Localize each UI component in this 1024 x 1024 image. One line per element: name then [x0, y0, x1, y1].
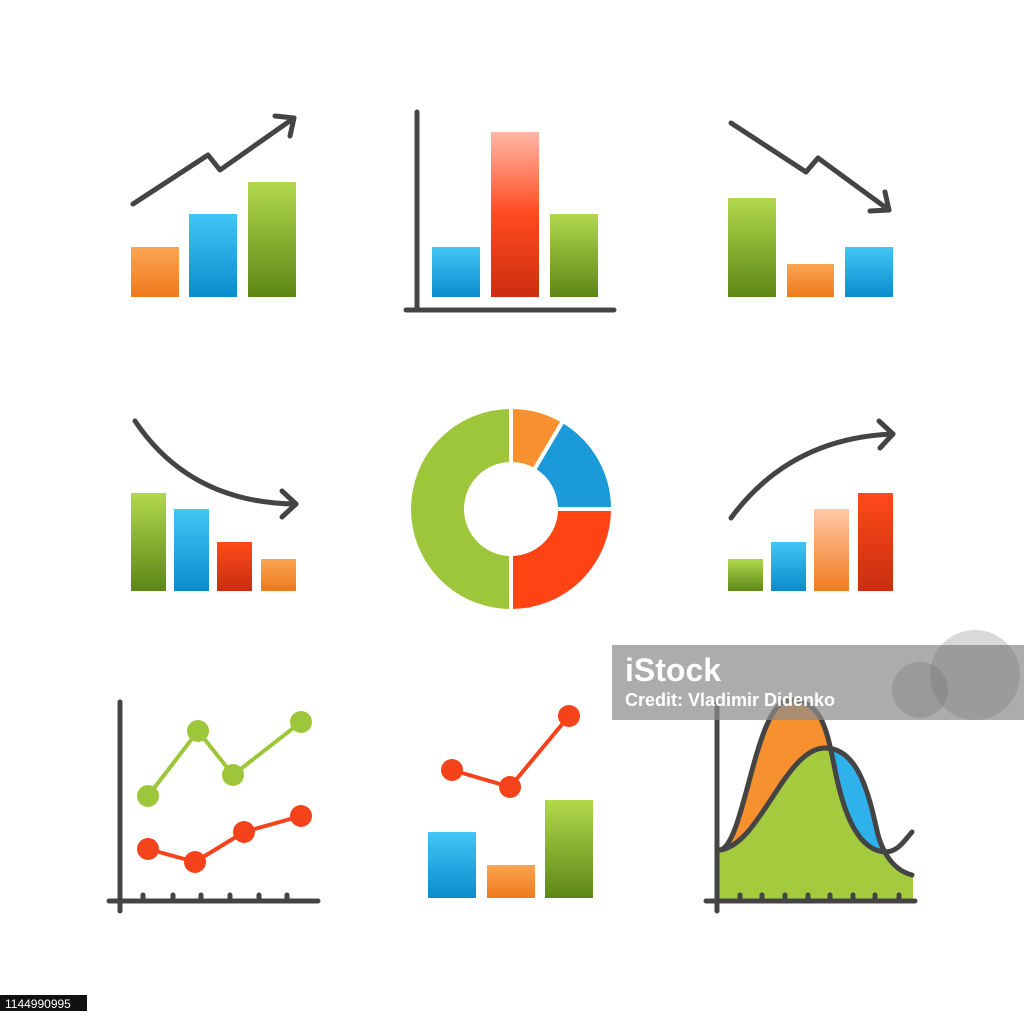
arrow: zigzag up [133, 116, 294, 204]
axes with ticks [109, 702, 318, 911]
panel: bars with line [428, 705, 593, 898]
arrow: curve down [135, 421, 296, 517]
red line [137, 805, 312, 873]
panel: rising bars with zigzag arrow [131, 116, 296, 297]
image id tag [0, 995, 87, 1011]
bars [131, 493, 296, 591]
image id tag: 1144990995 [5, 997, 71, 1011]
curve outlines [720, 700, 912, 852]
panel: decreasing bars with curved arrow [131, 421, 296, 591]
watermark band: Credit: Vladimir Didenko [625, 690, 835, 710]
bars [428, 800, 593, 898]
panel: donut chart [409, 407, 613, 611]
green area [717, 748, 913, 902]
panel: falling bars with zigzag arrow [728, 123, 893, 297]
arrow: zigzag down [731, 123, 889, 211]
green line [137, 711, 312, 807]
panel: distribution curves [706, 700, 915, 911]
axes [406, 112, 614, 310]
watermark band [612, 630, 1024, 720]
axes [706, 702, 915, 911]
bars [728, 198, 893, 297]
panel: increasing bars with curved arrow [728, 421, 893, 591]
panel: line chart [109, 702, 318, 911]
arrow: curve up [731, 421, 893, 518]
bars [432, 132, 598, 297]
bars [131, 182, 296, 297]
bars [728, 493, 893, 591]
panel: bar chart with axes [406, 112, 614, 310]
blue area [717, 748, 913, 902]
orange area [717, 700, 885, 902]
red line [441, 705, 580, 798]
watermark band: iStock [625, 652, 721, 688]
